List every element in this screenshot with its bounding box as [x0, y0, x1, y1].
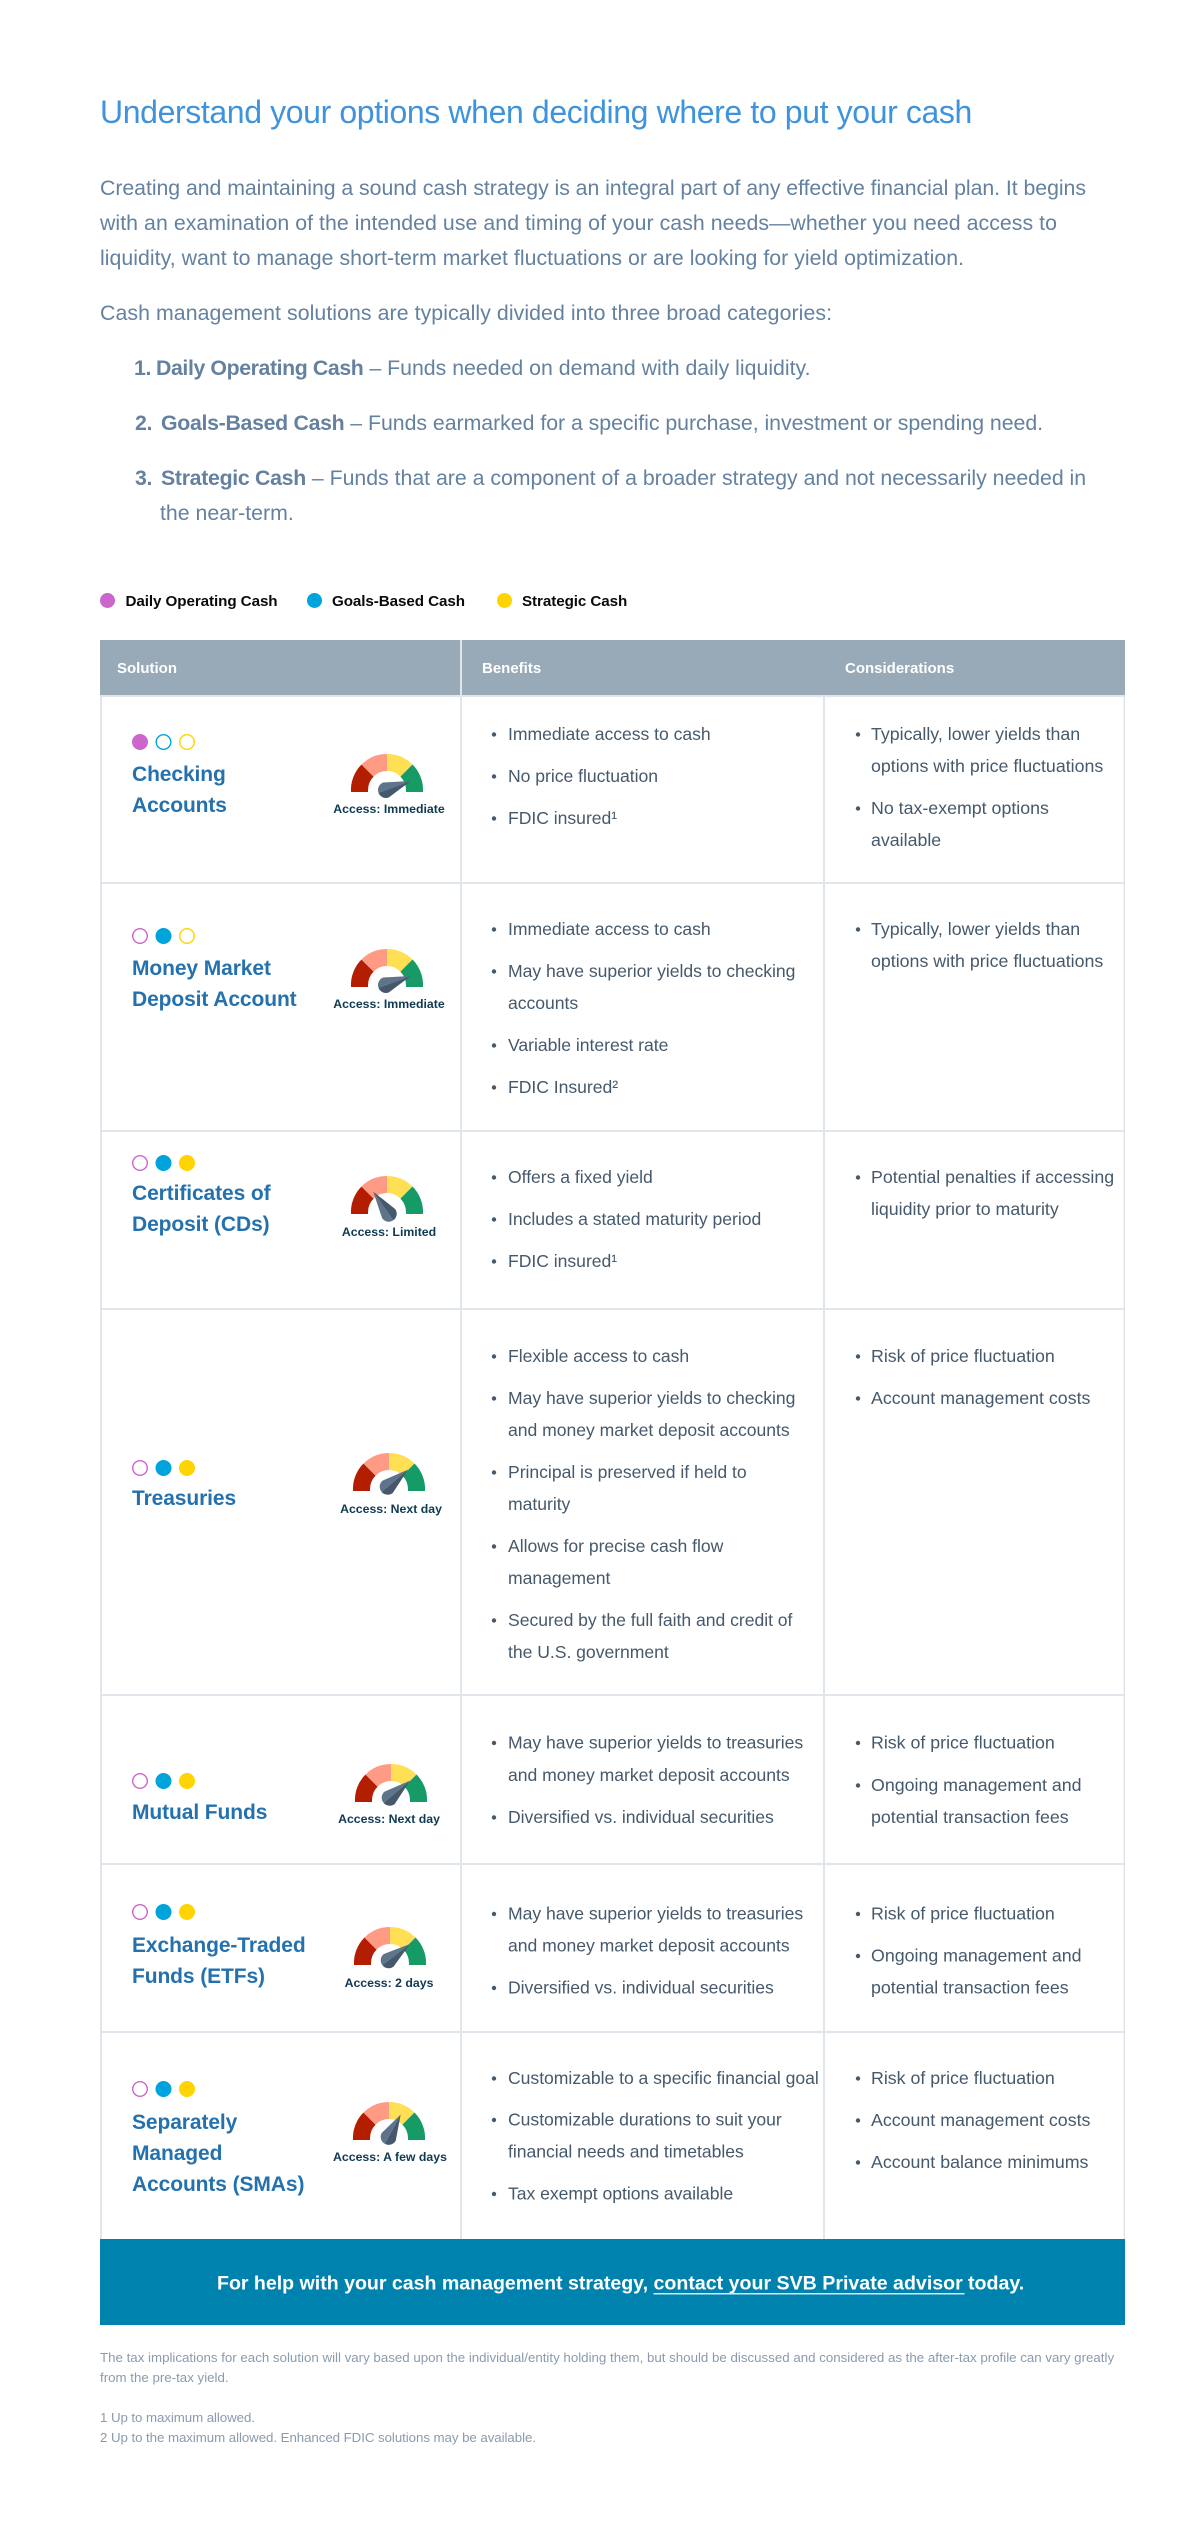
legend: Strategic Cash [522, 593, 627, 610]
benefits: Separately Managed Accounts: Customizable durations to suit your [508, 2110, 782, 2130]
call to action banner: today. [968, 2272, 1024, 2294]
considerations: Checking Accounts: Typically, lower yields than [871, 724, 1080, 744]
benefits: Exchange-Traded Funds: and money market deposit accounts [508, 1936, 790, 1956]
solution name: Accounts [132, 794, 227, 817]
table header [100, 640, 1125, 695]
considerations: Mutual Funds: potential transaction fees [871, 1807, 1069, 1827]
solution name: Certificates of [132, 1182, 272, 1205]
solution name: Separately [132, 2111, 238, 2134]
intro paragraph: Creating and maintaining a sound cash strategy is an integral part of any effective financial plan. It begins [100, 176, 1086, 200]
gauge: access immediate [333, 949, 445, 1011]
solution name [132, 763, 227, 817]
numbered list of categories [134, 356, 1086, 525]
solution name: Mutual Funds [132, 1801, 267, 1824]
benefits: Mutual Funds: and money market deposit accounts [508, 1765, 790, 1785]
solution name: Accounts (SMAs) [132, 2173, 304, 2196]
intro paragraph: with an examination of the intended use and timing of your cash needs—whether you need access to [99, 211, 1057, 235]
gauge: access next day: Access: Next day [338, 1812, 440, 1826]
benefits: Money Market Deposit Account: Variable interest rate [508, 1035, 668, 1055]
benefits: Treasuries: the U.S. government [508, 1642, 669, 1662]
row: Treasuries [132, 1453, 442, 1516]
considerations: Separately Managed Accounts [856, 2068, 1091, 2172]
benefits: Separately Managed Accounts [492, 2068, 819, 2204]
considerations: Separately Managed Accounts: Account management costs [871, 2110, 1091, 2130]
benefits: Mutual Funds: Diversified vs. individual securities [508, 1807, 774, 1827]
benefits: Mutual Funds: May have superior yields to treasuries [508, 1732, 803, 1752]
benefits: Checking Accounts [492, 724, 711, 828]
benefits: Certificates of Deposit: FDIC insured¹ [508, 1251, 617, 1271]
gauge: access a few days [333, 2102, 447, 2164]
legend [100, 593, 627, 610]
considerations: Exchange-Traded Funds: potential transaction fees [871, 1978, 1069, 1998]
benefits: Certificates of Deposit: Offers a fixed yield [508, 1167, 653, 1187]
considerations: Exchange-Traded Funds: Ongoing management and [871, 1946, 1082, 1966]
gauge: access 2 days [345, 1927, 434, 1990]
considerations: Exchange-Traded Funds: Risk of price fluctuation [871, 1904, 1055, 1924]
gauge: access limited [342, 1176, 436, 1239]
numbered list of categories: Goals-Based Cash – Funds earmarked for a specific purchase, investment or spending need. [161, 411, 1043, 435]
considerations: Checking Accounts: options with price fluctuations [871, 756, 1103, 776]
row: Checking Accounts [132, 734, 445, 817]
category dots [133, 1904, 195, 1920]
benefits: Certificates of Deposit: Includes a stated maturity period [508, 1209, 761, 1229]
benefits: Money Market Deposit Account: accounts [508, 993, 578, 1013]
solution name: Managed [132, 2142, 222, 2165]
benefits: Treasuries: and money market deposit accounts [508, 1420, 790, 1440]
considerations: Mutual Funds: Risk of price fluctuation [871, 1732, 1055, 1752]
considerations: Money Market Deposit Account: options with price fluctuations [871, 951, 1103, 971]
benefits: Exchange-Traded Funds: Diversified vs. individual securities [508, 1978, 774, 1998]
considerations: Mutual Funds: Ongoing management and [871, 1775, 1082, 1795]
benefits: Money Market Deposit Account [492, 919, 795, 1097]
intro paragraph [99, 176, 1086, 270]
numbered list of categories: Strategic Cash – Funds that are a component of a broader strategy and not necessarily needed in [161, 466, 1086, 490]
numbered list of categories: the near-term. [160, 501, 294, 525]
considerations: Certificates of Deposit [856, 1167, 1114, 1219]
considerations: Treasuries: Risk of price fluctuation [871, 1346, 1055, 1366]
intro paragraph: liquidity, want to manage short-term market fluctuations or are looking for yield optimization. [100, 246, 964, 270]
considerations: Certificates of Deposit: liquidity prior to maturity [871, 1199, 1059, 1219]
benefits: Treasuries: May have superior yields to checking [508, 1388, 795, 1408]
solution name: Money Market [132, 957, 271, 980]
solution name: Deposit Account [132, 988, 297, 1011]
benefits: Separately Managed Accounts: Tax exempt options available [508, 2184, 733, 2204]
gauge: access next day [338, 1764, 440, 1826]
benefits: Exchange-Traded Funds: May have superior yields to treasuries [508, 1904, 803, 1924]
solution name [132, 957, 297, 1011]
gauge: access immediate: Access: Immediate [333, 997, 445, 1011]
benefits: Checking Accounts: Immediate access to cash [508, 724, 711, 744]
categories lead-in: Cash management solutions are typically divided into three broad categories: [100, 301, 832, 325]
benefits: Treasuries: maturity [508, 1494, 571, 1514]
table header: Benefits [482, 660, 541, 677]
benefits: Money Market Deposit Account: May have superior yields to checking [508, 961, 795, 981]
benefits: Mutual Funds [492, 1732, 803, 1827]
gauge: access a few days: Access: A few days [333, 2150, 447, 2164]
benefits: Checking Accounts: FDIC insured¹ [508, 808, 617, 828]
benefits: Treasuries: Allows for precise cash flow [508, 1536, 724, 1556]
considerations: Money Market Deposit Account: Typically, lower yields than [871, 919, 1080, 939]
benefits: Money Market Deposit Account: Immediate access to cash [508, 919, 711, 939]
tax footnote: from the pre-tax yield. [100, 2370, 229, 2385]
category dots [133, 928, 194, 944]
tax footnote: The tax implications for each solution will vary based upon the individual/entity holding them, but should be discussed and considered as the after-tax profile can vary greatly [100, 2350, 1114, 2365]
solution name: Checking [132, 763, 226, 786]
benefits: Treasuries: Principal is preserved if held to [508, 1462, 747, 1482]
solution name [132, 1934, 306, 1988]
gauge: access immediate [333, 754, 445, 816]
row: Money Market Deposit Account [132, 928, 445, 1011]
benefits: Treasuries [492, 1346, 795, 1662]
considerations: Mutual Funds [856, 1732, 1082, 1827]
considerations: Checking Accounts: No tax-exempt options [871, 798, 1049, 818]
numbered list of categories: Daily Operating Cash – Funds needed on demand with daily liquidity. [156, 356, 811, 380]
table header: Solution [117, 660, 177, 677]
considerations: Treasuries [856, 1346, 1091, 1408]
considerations: Certificates of Deposit: Potential penalties if accessing [871, 1167, 1114, 1187]
considerations: Money Market Deposit Account [856, 919, 1103, 971]
row: Separately Managed Accounts [132, 2081, 447, 2196]
category dots [133, 1155, 195, 1171]
legend: Goals-Based Cash [332, 593, 465, 610]
row: Exchange-Traded Funds [132, 1904, 434, 1990]
benefits: Treasuries: Secured by the full faith and credit of [508, 1610, 793, 1630]
solution name [132, 2111, 304, 2196]
gauge: access limited: Access: Limited [342, 1225, 436, 1239]
table header: Considerations [845, 660, 954, 677]
numbered footnotes: 2 Up to the maximum allowed. Enhanced FDIC solutions may be available. [100, 2430, 536, 2445]
gauge: access 2 days: Access: 2 days [345, 1976, 434, 1990]
benefits: Treasuries: management [508, 1568, 611, 1588]
benefits: Checking Accounts: No price fluctuation [508, 766, 658, 786]
benefits: Treasuries: Flexible access to cash [508, 1346, 689, 1366]
benefits: Separately Managed Accounts: Customizable to a specific financial goal [508, 2068, 819, 2088]
call to action banner: contact your SVB Private advisor [654, 2272, 963, 2294]
considerations: Separately Managed Accounts: Account balance minimums [871, 2152, 1089, 2172]
numbered footnotes [100, 2410, 536, 2445]
solution name: Funds (ETFs) [132, 1965, 265, 1988]
considerations: Checking Accounts [856, 724, 1103, 850]
numbered footnotes: 1 Up to maximum allowed. [100, 2410, 255, 2425]
category dots [132, 734, 194, 750]
benefits: Money Market Deposit Account: FDIC Insured² [508, 1077, 618, 1097]
call to action banner [100, 2239, 1125, 2325]
category dots [133, 1460, 195, 1476]
numbered list of categories: 1. [134, 356, 151, 380]
solution name [132, 1182, 272, 1236]
row: Certificates of Deposit [132, 1155, 436, 1239]
solution name: Exchange-Traded [132, 1934, 306, 1957]
gauge: access next day [340, 1453, 442, 1516]
legend: Daily Operating Cash [126, 593, 278, 610]
title: Understand your options when deciding where to put your cash [100, 94, 972, 130]
row: Mutual Funds [132, 1764, 440, 1826]
considerations: Exchange-Traded Funds [856, 1904, 1082, 1998]
considerations: Separately Managed Accounts: Risk of price fluctuation [871, 2068, 1055, 2088]
gauge: access immediate: Access: Immediate [333, 802, 445, 816]
gauge: access next day: Access: Next day [340, 1502, 442, 1516]
benefits: Separately Managed Accounts: financial needs and timetables [508, 2142, 744, 2162]
considerations: Treasuries: Account management costs [871, 1388, 1091, 1408]
considerations: Checking Accounts: available [871, 830, 941, 850]
numbered list of categories: 3. [135, 466, 152, 490]
tax footnote [100, 2350, 1114, 2385]
call to action banner: For help with your cash management strategy, [217, 2272, 648, 2294]
solution name: Treasuries [132, 1487, 236, 1510]
benefits: Exchange-Traded Funds [492, 1904, 803, 1998]
solution name: Deposit (CDs) [132, 1213, 270, 1236]
numbered list of categories: 2. [135, 411, 152, 435]
category dots [133, 1773, 195, 1789]
benefits: Certificates of Deposit [492, 1167, 761, 1271]
category dots [133, 2081, 195, 2097]
